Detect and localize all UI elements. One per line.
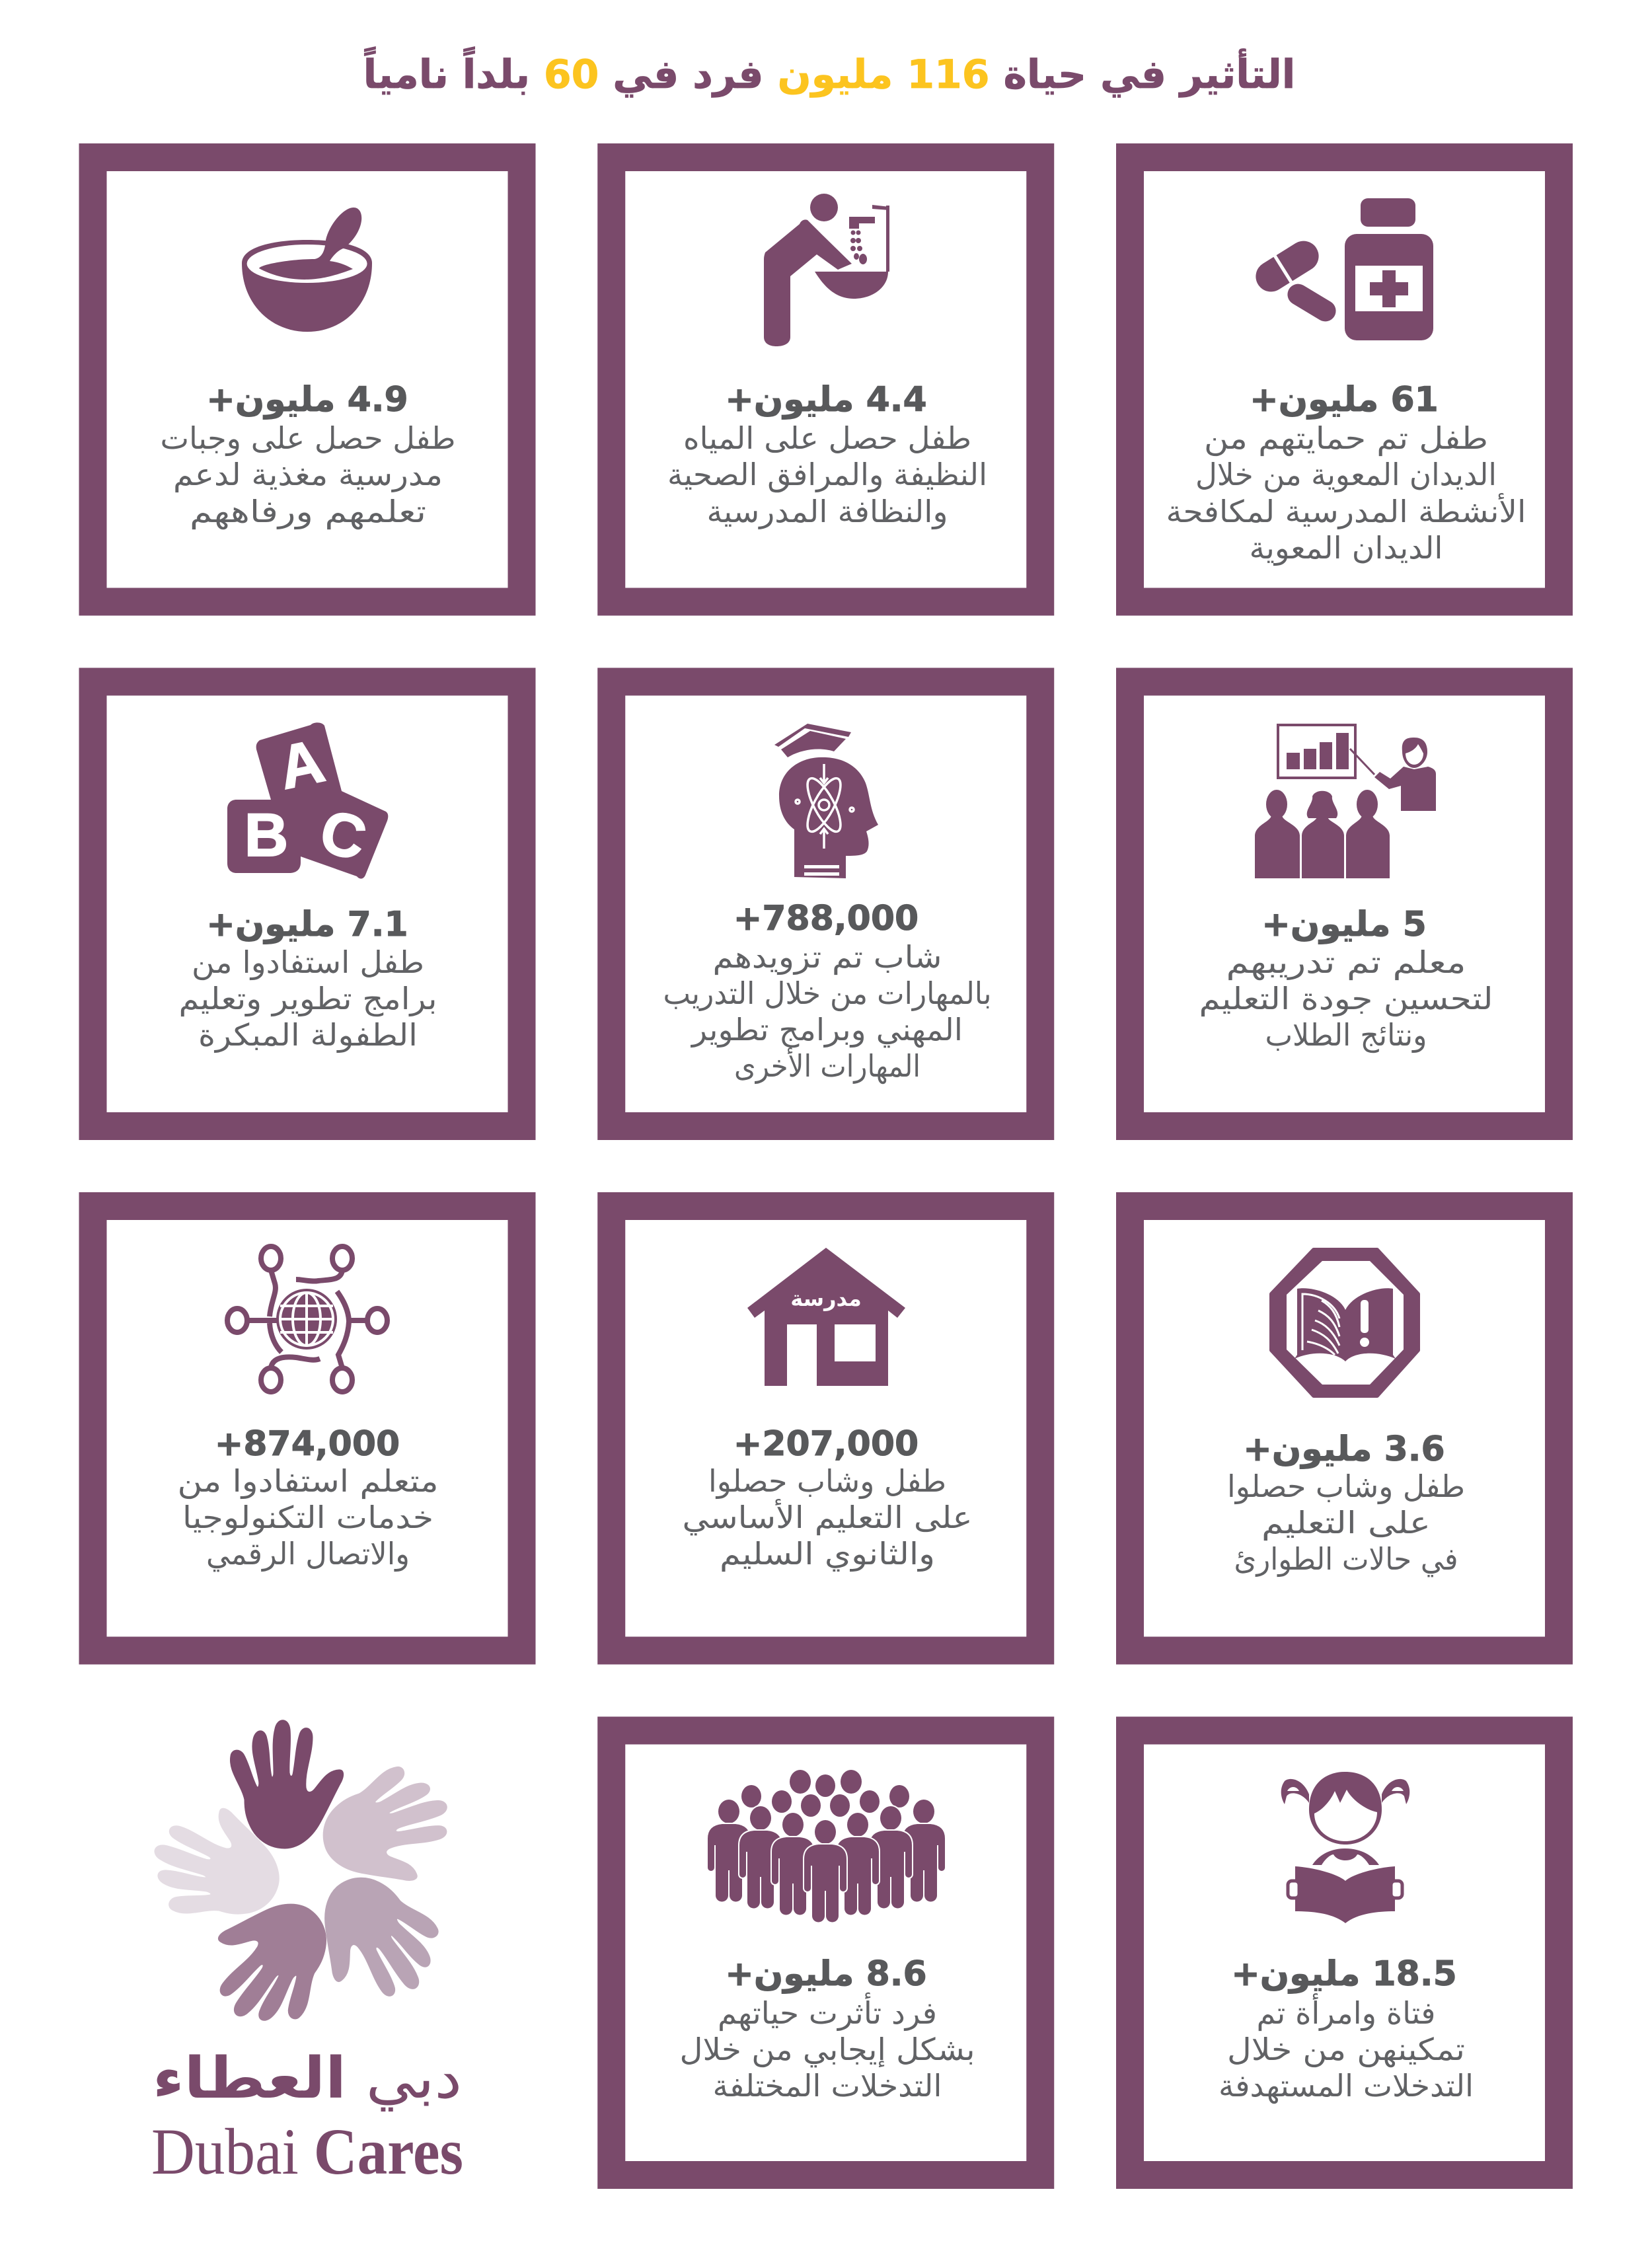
icon: ABC blocks: B [244,802,288,869]
stat: 788,000: +788,000 [733,899,919,938]
description: ونتائج الطلاب [1265,1017,1427,1053]
description: طفل حصل على المياه [683,420,971,456]
description: والنظافة المدرسية [707,494,948,530]
icon: crowd of people [708,1770,945,1922]
description: خدمات التكنولوجيا [182,1500,433,1536]
panel: teachers [1116,667,1573,1140]
panel: school meals [79,143,535,616]
panel: water and sanitation [597,143,1054,616]
description: طفل وشاب حصلوا [1227,1468,1465,1505]
icon: ABC blocks: C [314,797,373,873]
panel: youth skills [597,667,1054,1140]
description: طفل حصل على وجبات [160,420,456,457]
description [1199,944,1493,1053]
description: على التعليم الأساسي [682,1498,973,1536]
description: برامج تطوير وتعليم [178,981,437,1017]
stat: 4.9 million: 4.9 مليون+ [206,380,408,420]
panel: basic education [597,1192,1054,1664]
description: على التعليم [1261,1505,1431,1541]
description [1227,1468,1465,1578]
stat: 4.4 million: 4.4 مليون+ [725,380,927,420]
stat: 7.1 million: 7.1 مليون+ [206,905,408,944]
description: والثانوي السليم [720,1536,935,1572]
stat: 3.6 million: 3.6 مليون+ [1243,1429,1445,1469]
description: مدرسية مغذية لدعم [173,457,443,492]
description: الطفولة المبكرة [198,1017,418,1053]
logo English name: Dubai Cares [151,2115,463,2188]
description [682,1463,973,1572]
description [679,1992,975,2104]
icon: school house: مدرسة [790,1286,862,1311]
title: التأثير في حياة 116 مليون فرد في 60 بلداً نامياً [363,46,1295,98]
description: تعلمهم ورفاههم [190,494,426,530]
icon: ABC blocks [227,722,388,879]
description: متعلم استفادوا من [177,1463,439,1500]
description: النظيفة والمرافق الصحية [667,457,987,493]
description: شاب تم تزويدهم [712,939,942,975]
stat: 61 million: 61 مليون+ [1250,380,1439,420]
description: الديدان المعوية [1249,530,1443,566]
icon: ABC blocks: A [273,727,330,802]
description: بشكل إيجابي من خلال [679,2032,975,2068]
description: فتاة وامرأة تم [1257,1993,1435,2032]
description: المهني وبرامج تطوير [691,1012,963,1048]
panel: emergencies [1116,1192,1573,1664]
description [178,944,437,1053]
description: الديدان المعوية من خلال [1195,457,1497,493]
description: المهارات الأخرى [734,1047,920,1085]
icon: network globe [227,1246,387,1392]
panel: people impacted [597,1717,1054,2189]
stat: 18.5 million: 18.5 مليون+ [1231,1954,1457,1994]
icon: teacher presenting to students [1255,725,1436,878]
description [160,420,456,530]
panel: digital learners [79,1192,535,1664]
panel: girls and women [1116,1717,1573,2189]
description: معلم تم تدريبهم [1226,944,1466,980]
icon: girl reading a book [1281,1772,1409,1923]
panel: deworming [1116,143,1573,616]
description [663,939,991,1085]
description: طفل وشاب حصلوا [708,1463,946,1500]
description: تمكينهن من خلال [1227,2032,1465,2068]
logo Arabic name: دبي العطاء [153,2045,462,2112]
icon: school house [747,1248,905,1386]
icon: head with atom and graduation cap [774,724,878,878]
description: في حالات الطوارئ [1234,1541,1458,1578]
description [177,1463,439,1572]
icon: book in octagon [1271,1250,1418,1396]
description: طفل تم حمايتهم من [1204,420,1488,457]
description: الأنشطة المدرسية لمكافحة [1166,492,1526,529]
icon: bowl and spoon [242,208,372,332]
stat: 8.6 million: 8.6 مليون+ [725,1954,927,1994]
icon: medicine bottle and pills [1250,198,1433,340]
description: التدخلات المستهدفة [1219,2068,1474,2104]
description: والاتصال الرقمي [206,1536,410,1572]
description [1219,1993,1474,2104]
logo: Dubai Cares [139,1721,465,2188]
description: بالمهارات من خلال التدريب [663,975,991,1012]
panel: early childhood [79,667,535,1140]
stat: 5 million: 5 مليون+ [1261,905,1427,944]
description: فرد تأثرت حياتهم [718,1992,937,2032]
description [667,420,987,530]
description: التدخلات المختلفة [712,2068,942,2104]
logo hands [139,1721,465,2045]
description: طفل استفادوا من [192,944,424,981]
stat: 874,000: +874,000 [215,1424,400,1464]
stat: 207,000: +207,000 [733,1424,919,1464]
description [1166,420,1526,566]
icon: person washing hands [764,194,889,346]
description: لتحسين جودة التعليم [1199,981,1493,1017]
